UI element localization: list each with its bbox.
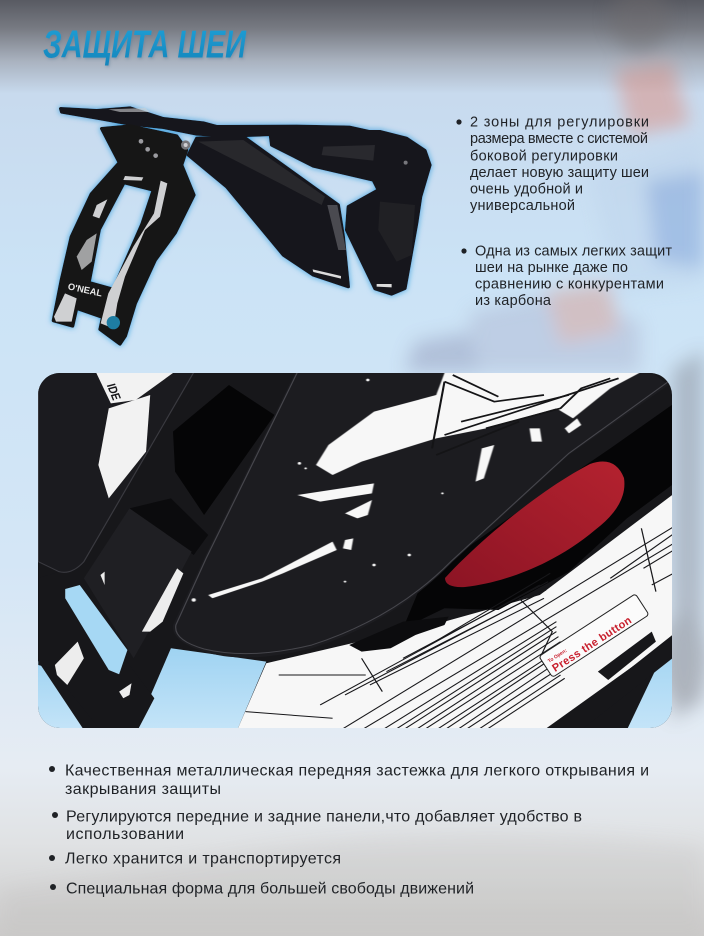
black scratch lines top right [432,375,619,455]
slot [65,585,127,674]
brace top plate [61,108,380,136]
black band under button [403,402,677,628]
bullet item 1: закрывания защиты [65,781,221,798]
neck brace product image [53,108,430,344]
recess [173,385,275,515]
bullet text block 1: очень удобной и [470,182,583,198]
brace right body [270,132,430,294]
press the button sticker: Press the button [550,614,634,675]
bullet item 4: Специальная форма для большей свободы движений [66,880,474,898]
black splatter below shield [349,617,449,652]
brace textured foam [198,140,325,205]
brace logo text: O'NEAL [67,281,103,299]
side plate [38,372,194,572]
bullet text block 1: делает новую защиту шеи [470,165,649,181]
sky gaps [136,648,266,730]
press the button sticker [539,594,649,677]
brace graphic splashes [54,108,167,328]
diagonal graphic lines lower right [246,525,677,730]
bullet text block 2: Одна из самых легких защит [475,244,672,260]
bullet text block 2 [461,244,672,309]
press the button sticker: To Open: [547,648,569,665]
bullet item 1: Качественная металлическая передняя застежка для легкого открывания и [65,762,649,780]
side plate label: IDE [104,383,123,402]
white graphic area lower right [237,492,677,730]
bullet item 3: Легко хранится и транспортируется [65,850,341,868]
bullet text block 1: универсальной [470,198,575,214]
red release button [445,461,624,587]
bullet text block 1: 2 зоны для регулировки [470,114,649,130]
bullet text block 2: из карбона [475,293,552,309]
white area top left [51,375,71,402]
bullet item 2: Регулируются передние и задние панели,что добавляет удобство в [66,808,582,826]
brace front loop [53,126,194,344]
bullet item 2: использовании [66,826,184,843]
bullet text block 2: шеи на рынке даже по [475,260,628,276]
close-up photo panel [36,372,677,730]
shield white splashes [192,373,639,602]
bullet text block 1: боковой регулировки [470,148,618,164]
bottom bullet list [49,762,649,898]
bullet item 1 [49,762,649,798]
brace logo badge [107,316,120,329]
black lower side strap [38,661,154,728]
bullet text block 2: сравнению с конкурентами [475,276,664,292]
brace bolts [139,139,408,165]
bullet text block 1 [456,114,649,214]
bullet item 2 [52,808,582,843]
main shield [211,373,653,658]
bottom right black strip [546,643,672,728]
brace middle arm [188,137,348,287]
title: ЗАЩИТА ШЕИ [43,24,247,66]
black lower plate splashes [55,568,183,698]
bullet text block 1: размера вместе с системой [470,131,648,147]
